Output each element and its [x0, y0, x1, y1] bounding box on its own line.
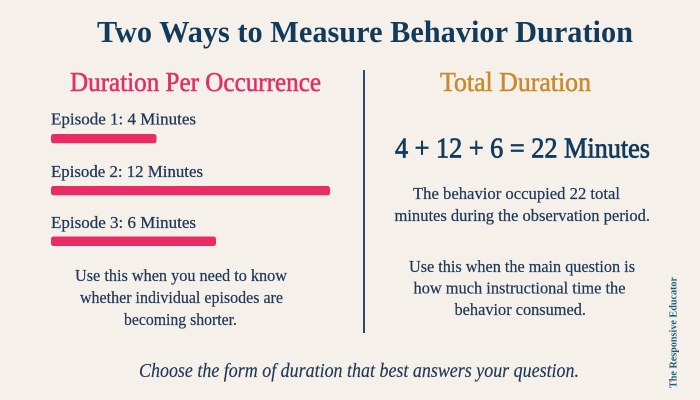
text block: when to use total duration: Use this when the main question is: [409, 257, 635, 276]
equation: 4 + 12 + 6 = 22 Minutes: [395, 132, 650, 164]
panel: total duration: [394, 67, 650, 319]
title: Two Ways to Measure Behavior Duration: [97, 14, 633, 49]
heading: total duration: Total Duration: [440, 67, 591, 97]
text block: when to use total duration: [409, 257, 635, 319]
text block: when to use total duration: how much instructional time the: [414, 278, 626, 298]
episode 1 row: [51, 110, 196, 143]
panel: duration per occurrence: [51, 67, 330, 329]
text block: when to use duration per occurrence: becoming shorter.: [124, 310, 237, 329]
heading: duration per occurrence: Duration Per Occurrence: [70, 67, 321, 97]
episode 1 row: Episode 1: 4 Minutes: [51, 110, 196, 128]
text block: when to use total duration: behavior consumed.: [454, 300, 586, 319]
text block: when to use duration per occurrence: [75, 266, 288, 329]
episode 3 row: [51, 213, 216, 246]
text block: when to use duration per occurrence: Use this when you need to know: [75, 266, 288, 285]
episode 3 row: Episode 3: 6 Minutes: [51, 213, 196, 232]
closing statement: Choose the form of duration that best answers your question.: [139, 360, 579, 382]
text block: total duration explanation: [394, 184, 650, 225]
episode 2 row: [51, 162, 330, 195]
episode 2 row: Episode 2: 12 Minutes: [51, 162, 203, 181]
column divider: [363, 70, 365, 333]
text block: total duration explanation: minutes during the observation period.: [394, 206, 650, 225]
text block: when to use duration per occurrence: whether individual episodes are: [80, 288, 283, 307]
text block: total duration explanation: The behavior occupied 22 total: [413, 184, 620, 203]
vertical credit: The Responsive Educator: [668, 277, 680, 388]
